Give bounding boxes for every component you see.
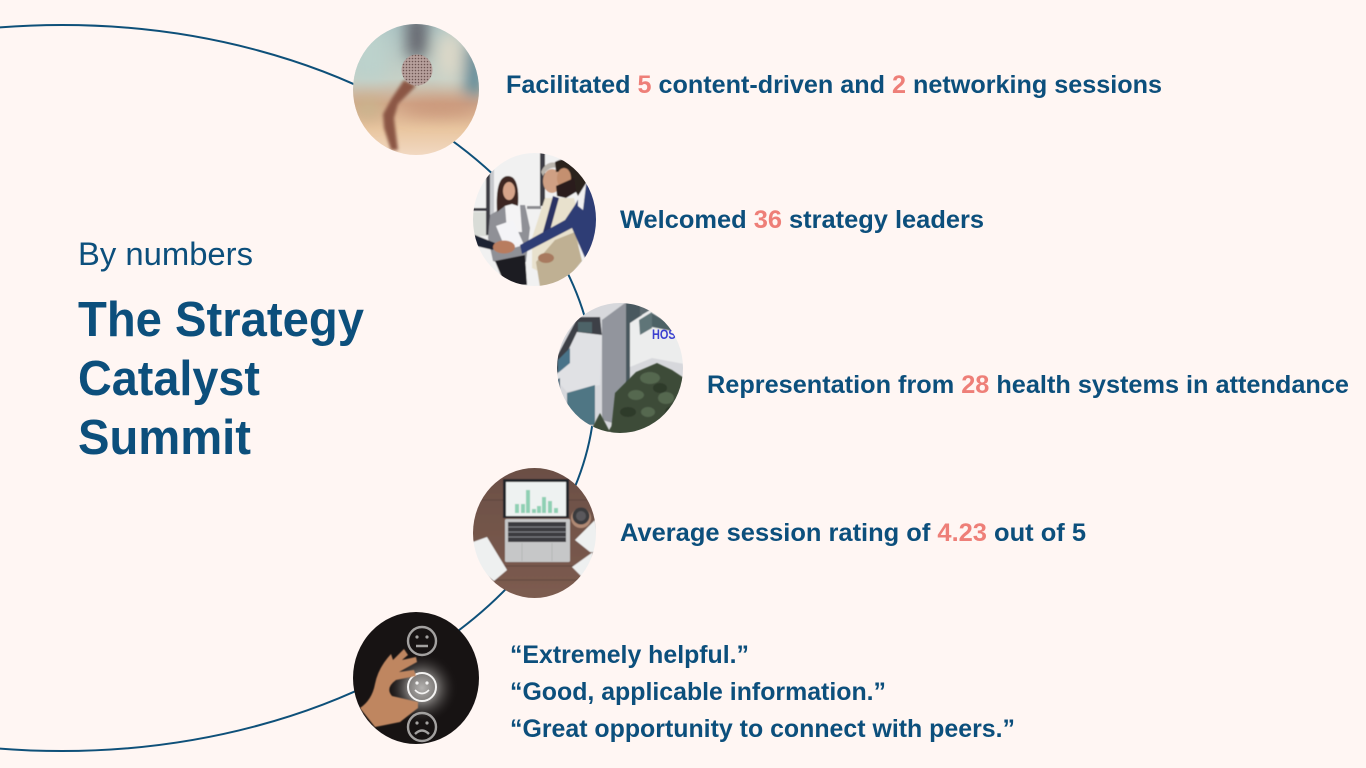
attendee quotes: “Good, applicable information.” [510,678,886,706]
bearded man in navy suit [520,159,600,258]
connecting curved line [0,25,595,751]
subtitle: By numbers: By numbers [78,236,253,272]
stat: session rating: Average session rating of 4.23 out of 5 [620,519,1086,547]
neutral face [408,627,436,655]
stat: sessions: Facilitated 5 content-driven and 2 networking sessions [506,71,1162,99]
photo: hospital building [557,303,683,433]
trees [592,362,682,433]
sad face [408,713,436,741]
stat: health systems: Representation from 28 health systems in attendance [707,371,1349,399]
woman in grey jacket [488,176,530,285]
photo: microphone [353,24,479,155]
smiling face [408,673,436,701]
HOSP sign: HOSP [652,327,683,342]
attendee quotes: “Extremely helpful.” [510,641,749,669]
photo: laptop showing charts [470,465,600,601]
attendee quotes [510,641,1015,743]
stat: leaders: Welcomed 36 strategy leaders [620,206,984,234]
photo: handshake between leaders [473,153,596,286]
attendee quotes: “Great opportunity to connect with peers.” [510,715,1015,743]
photo: hand selecting smiley rating [350,608,482,748]
hand [360,649,418,727]
title: The Strategy Catalyst Summit: Summit [78,411,251,465]
title: The Strategy Catalyst Summit: The Strategy [78,293,364,347]
title: The Strategy Catalyst Summit: Catalyst [78,352,260,406]
older man [532,162,580,270]
title: The Strategy Catalyst Summit [78,293,364,465]
beige coat [536,232,582,287]
